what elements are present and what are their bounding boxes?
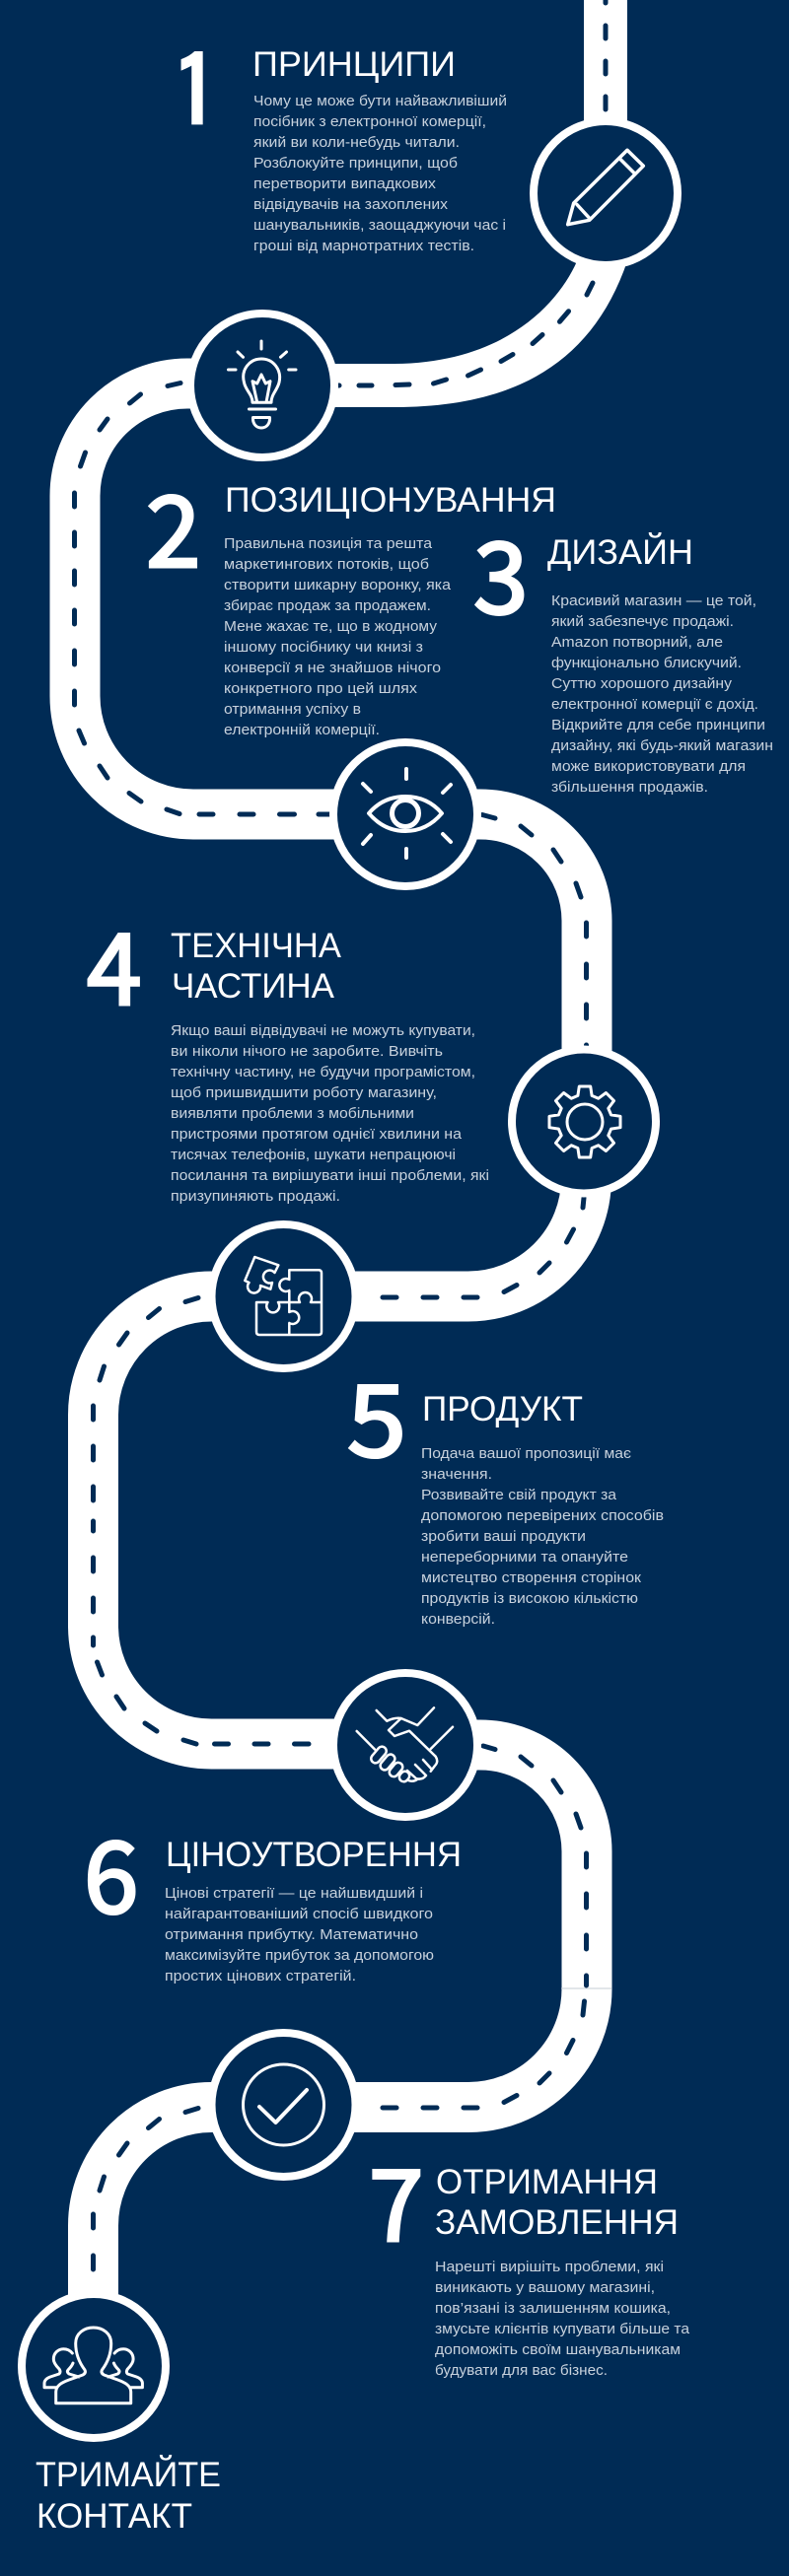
text block 7: будувати для вас бізнес. xyxy=(435,2362,608,2379)
text block 6: максимізуйте прибуток за допомогою xyxy=(165,1947,434,1964)
text block 3: збільшення продажів. xyxy=(551,779,708,796)
text block 2: Мене жахає те, що в жодному xyxy=(224,618,438,635)
text block 5: непереборними та опануйте xyxy=(421,1549,628,1566)
text block 2: електронній комерції. xyxy=(224,722,380,738)
heading 1: ПРИНЦИПИ xyxy=(252,45,456,84)
step 1: principles xyxy=(171,40,507,254)
text block 2: створити шикарну воронку, яка xyxy=(224,577,452,593)
text block 4: Якщо ваші відвідувачі не можуть купувати, xyxy=(171,1022,475,1039)
text block 4: технічну частину, не будучи програмістом, xyxy=(171,1064,475,1080)
text block 1: гроші від марнотратних тестів. xyxy=(253,238,474,254)
icon: check mark xyxy=(211,2033,355,2177)
heading 2: ПОЗИЦІОНУВАННЯ xyxy=(225,481,556,520)
number 3: 3 xyxy=(473,499,529,642)
winding road xyxy=(75,0,627,2366)
text block 4: посилання та вирішувати інші проблеми, які xyxy=(171,1167,489,1184)
heading 7: ОТРИМАННЯ xyxy=(436,2163,658,2201)
text block 7 xyxy=(435,2259,690,2379)
text block 7: пов’язані із залишенням кошика, xyxy=(435,2300,671,2317)
text block 2: отримання успіху в xyxy=(224,701,361,718)
text block 6: простих цінових стратегій. xyxy=(165,1968,356,1984)
road centre dashes xyxy=(75,0,606,2269)
text block 2: Правильна позиція та решта xyxy=(224,535,433,552)
number 7: 7 xyxy=(369,2126,424,2269)
number 5: 5 xyxy=(347,1342,406,1485)
text block 6: найгарантованіший спосіб швидкого xyxy=(165,1906,433,1922)
footer heading xyxy=(36,2455,221,2536)
text block 3: Відкрийте для себе принципи xyxy=(551,717,765,733)
heading 4 xyxy=(171,927,342,1006)
text block 1: шанувальників, заощаджуючи час і xyxy=(253,217,506,234)
icon: puzzle xyxy=(211,1224,355,1368)
number 1: 1 xyxy=(171,40,221,141)
text block 1: Розблокуйте принципи, щоб xyxy=(253,155,458,172)
text block 7: Нарешті вирішіть проблеми, які xyxy=(435,2259,664,2275)
text block 1: посібник з електронної комерції, xyxy=(253,113,486,130)
number 4: 4 xyxy=(87,890,142,1033)
text block 4 xyxy=(171,1022,489,1205)
text block 5: продуктів із високою кількістю xyxy=(421,1590,638,1607)
step 2: positioning xyxy=(146,453,556,738)
text block 5 xyxy=(421,1445,664,1628)
text block 2 xyxy=(224,535,452,738)
text block 3: Красивий магазин — це той, xyxy=(551,592,756,609)
text block 3: може використовувати для xyxy=(551,758,746,775)
text block 5: Розвивайте свій продукт за xyxy=(421,1487,617,1503)
heading 7: ЗАМОВЛЕННЯ xyxy=(435,2203,679,2242)
text block 3: електронної комерції є дохід. xyxy=(551,696,758,713)
text block 4: щоб пришвидшити роботу магазину, xyxy=(171,1084,437,1101)
icon: gear xyxy=(512,1049,656,1193)
text block 4: ви ніколи нічого не заробите. Вивчіть xyxy=(171,1043,443,1060)
text block 5: значення. xyxy=(421,1466,492,1483)
text block 5: мистецтво створення сторінок xyxy=(421,1569,641,1586)
text block 5: Подача вашої пропозиції має xyxy=(421,1445,631,1462)
text block 1 xyxy=(253,93,507,254)
text block 6 xyxy=(165,1885,434,1984)
text block 1: Чому це може бути найважливіший xyxy=(253,93,507,109)
number 2: 2 xyxy=(146,453,201,595)
text block 4: пристроями протягом однієї хвилини на xyxy=(171,1126,463,1143)
text block 2: конверсії я не знайшов нічого xyxy=(224,660,441,676)
text block 7: змусьте клієнтів купувати більше та xyxy=(435,2321,690,2337)
text block 3 xyxy=(551,592,773,796)
text block 5: конверсій. xyxy=(421,1611,495,1628)
text block 3: який забезпечує продажі. xyxy=(551,613,734,630)
step 7: getting orders xyxy=(369,2126,690,2379)
icon: pencil xyxy=(534,121,678,265)
text block 6: отримання прибутку. Математично xyxy=(165,1926,418,1943)
text block 3: дизайну, які будь-який магазин xyxy=(551,737,773,754)
heading 6: ЦІНОУТВОРЕННЯ xyxy=(166,1836,462,1874)
step 5: product xyxy=(347,1342,664,1628)
step 6: pricing xyxy=(84,1798,462,1984)
road seam xyxy=(561,1987,611,1989)
text block 5: зробити ваші продукти xyxy=(421,1528,586,1545)
heading 7 xyxy=(435,2163,679,2242)
text block 3: Суттю хорошого дизайну xyxy=(551,675,733,692)
heading 5: ПРОДУКТ xyxy=(422,1390,583,1428)
text block 6: Цінові стратегії — це найшвидший і xyxy=(165,1885,423,1902)
step 4: technical part xyxy=(87,890,489,1205)
footer heading: КОНТАКТ xyxy=(36,2497,192,2536)
step 3: design xyxy=(473,499,773,796)
text block 4: тисячах телефонів, шукати непрацюючі xyxy=(171,1147,456,1163)
text block 1: перетворити випадкових xyxy=(253,175,437,192)
text block 1: відвідувачів на захоплених xyxy=(253,196,449,213)
text block 2: маркетингових потоків, щоб xyxy=(224,556,429,573)
text block 2: збирає продаж за продажем. xyxy=(224,597,431,614)
text block 2: конкретного про цей шлях xyxy=(224,680,418,697)
text block 3: функціонально блискучий. xyxy=(551,655,742,671)
heading 4: ТЕХНІЧНА xyxy=(171,927,342,965)
icon: handshake xyxy=(333,1673,477,1817)
text block 7: виникають у вашому магазині, xyxy=(435,2279,655,2296)
icon: light bulb xyxy=(190,313,334,457)
text block 1: який ви коли-небудь читали. xyxy=(253,134,460,151)
heading 3: ДИЗАЙН xyxy=(547,532,693,572)
text block 2: іншому посібнику чи книзі з xyxy=(224,639,423,656)
footer heading: ТРИМАЙТЕ xyxy=(36,2455,221,2494)
text block 5: допомогою перевірених способів xyxy=(421,1507,664,1524)
text block 4: виявляти проблеми з мобільними xyxy=(171,1105,414,1122)
text block 7: допоможіть своїм шанувальникам xyxy=(435,2341,681,2358)
icon: eye xyxy=(333,742,477,886)
text block 4: призупиняють продажі. xyxy=(171,1188,340,1205)
heading 4: ЧАСТИНА xyxy=(172,967,335,1006)
text block 3: Amazon потворний, але xyxy=(551,634,723,651)
icon: people xyxy=(22,2294,166,2438)
number 6: 6 xyxy=(84,1798,138,1941)
